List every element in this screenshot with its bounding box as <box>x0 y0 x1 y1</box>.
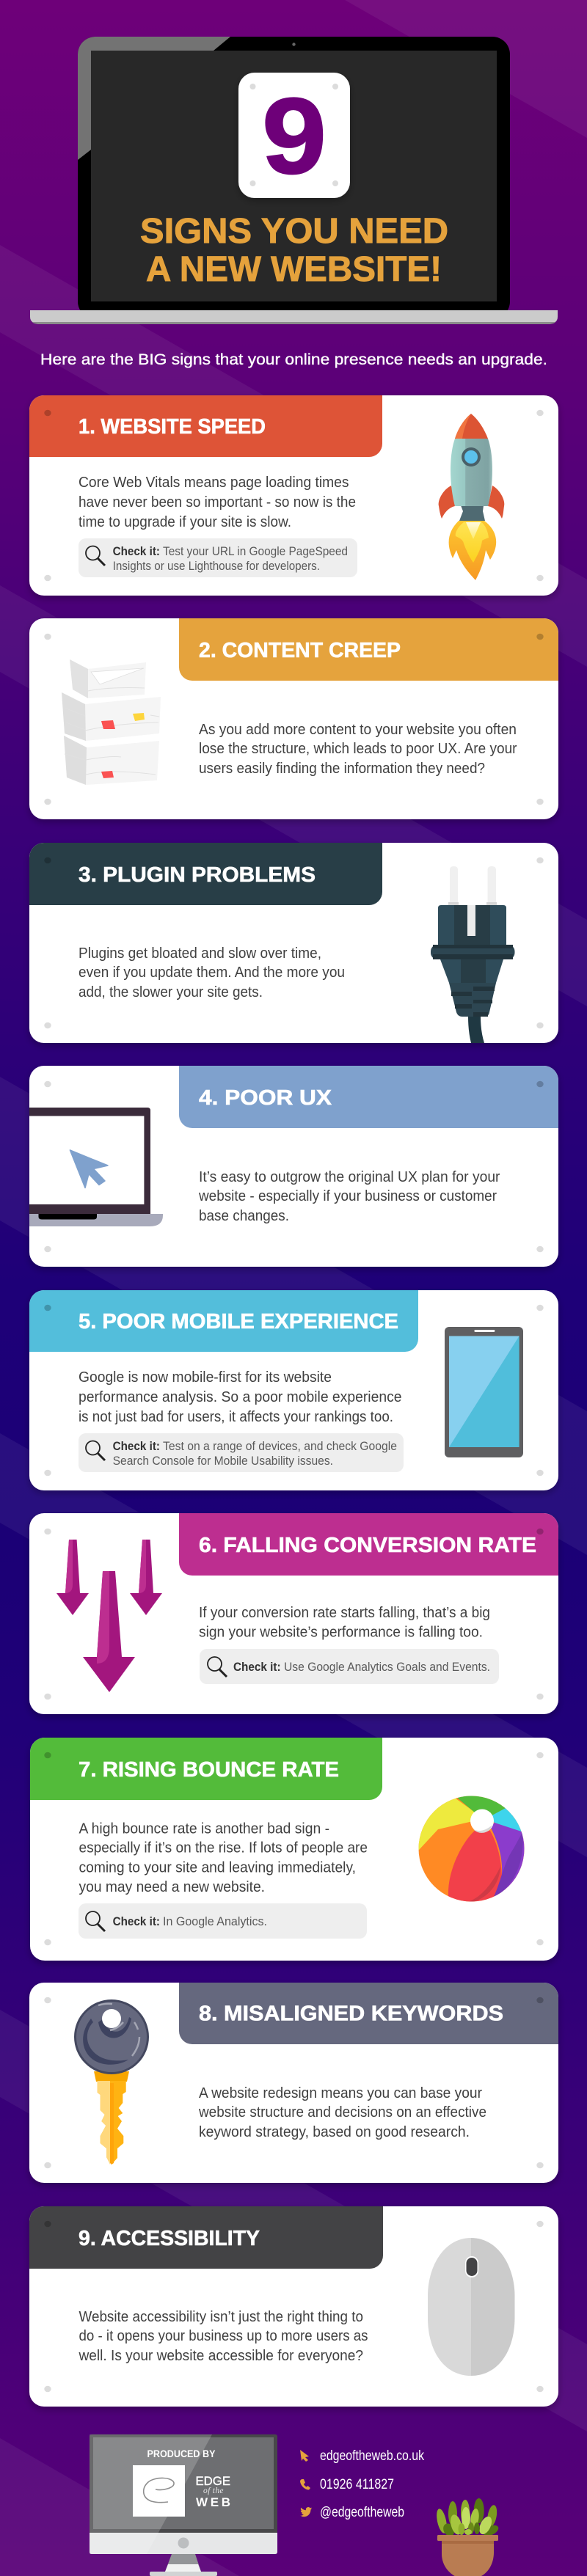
heading band <box>29 843 382 905</box>
arrow left <box>56 1540 89 1615</box>
heading band <box>179 1513 558 1576</box>
monitor stand <box>165 2554 201 2572</box>
monitor body <box>90 2434 277 2554</box>
heading band <box>29 395 382 457</box>
check it callout <box>79 1903 367 1939</box>
body text: If your conversion rate starts falling, that’s a big <box>199 1605 490 1621</box>
heading: 2. CONTENT CREEP <box>199 639 401 662</box>
arrow large <box>83 1571 135 1692</box>
heading band <box>29 2206 383 2269</box>
body text: website - especially if your business or customer <box>198 1188 497 1204</box>
check it callout: Insights or use Lighthouse for developers. <box>113 560 320 573</box>
check it callout <box>79 538 357 577</box>
body text: performance analysis. So a poor mobile experience <box>79 1389 402 1405</box>
logo: of the <box>203 2487 223 2495</box>
title <box>140 212 448 289</box>
hero: laptop with title <box>30 37 558 324</box>
icon: magnifier <box>208 1657 227 1677</box>
body text <box>199 1605 490 1640</box>
body text <box>198 2085 486 2140</box>
body text: sign your website’s performance is falling too. <box>199 1624 483 1640</box>
twitter: @edgeoftheweb <box>320 2505 404 2520</box>
footer: potted plant <box>435 2498 500 2576</box>
icon: falling arrows <box>56 1540 162 1692</box>
heading: 1. WEBSITE SPEED <box>79 415 266 439</box>
heading: 9. ACCESSIBILITY <box>79 2227 260 2250</box>
heading band <box>179 1066 558 1128</box>
body text: do - it opens your business up to more users as <box>79 2328 368 2344</box>
logo: EDGE <box>195 2474 230 2488</box>
body text <box>198 1169 500 1224</box>
icon: key <box>74 1999 149 2165</box>
panel: 7 rising bounce rate <box>30 1738 558 1961</box>
footer: contact details <box>300 2448 424 2520</box>
panel: 1 website speed <box>29 395 558 596</box>
icon: phone <box>300 2479 310 2489</box>
check it callout: Check it: <box>113 545 160 558</box>
body text: website structure and decisions on an effective <box>198 2104 486 2121</box>
title: SIGNS YOU NEED <box>140 212 448 251</box>
panel: 5 poor mobile experience <box>29 1290 558 1490</box>
panel: 4 poor UX <box>29 1066 558 1267</box>
laptop base <box>30 310 558 324</box>
body text: As you add more content to your website you often <box>199 722 517 738</box>
heading band <box>179 1983 558 2044</box>
phone: 01926 411827 <box>320 2477 394 2492</box>
check it callout: Check it: <box>113 1440 160 1453</box>
body text: you may need a new website. <box>79 1879 265 1895</box>
body text: lose the structure, which leads to poor UX. Are your <box>199 741 517 757</box>
icon: pointer <box>300 2450 309 2462</box>
body text: base changes. <box>199 1208 289 1224</box>
body text <box>79 2309 368 2364</box>
body text: Plugins get bloated and slow over time, <box>79 945 321 962</box>
icon: laptop with cursor <box>29 1108 163 1226</box>
body text: Core Web Vitals means page loading times <box>79 475 349 491</box>
body text: even if you update them. And the more you <box>79 965 345 981</box>
heading band <box>179 618 558 681</box>
intro text: Here are the BIG signs that your online presence needs an upgrade. <box>40 351 547 368</box>
body text: A high bounce rate is another bad sign - <box>79 1821 329 1837</box>
body text <box>79 1369 402 1425</box>
heading band <box>30 1738 382 1800</box>
body text <box>79 475 356 530</box>
body text: especially if it’s on the rise. If lots of people are <box>79 1840 368 1856</box>
check it callout: Use Google Analytics Goals and Events. <box>284 1661 490 1674</box>
body text: Website accessibility isn’t just the right thing to <box>79 2309 363 2325</box>
logo <box>133 2465 230 2517</box>
panel: 8 misaligned keywords <box>29 1983 558 2183</box>
footer: produced by monitor <box>90 2434 277 2576</box>
body text: well. Is your website accessible for everyone? <box>79 2348 363 2364</box>
body text: time to upgrade if your site is slow. <box>79 514 291 530</box>
body text <box>199 722 517 777</box>
body text: have never been so important - so now is the <box>79 494 356 511</box>
body text <box>79 945 345 1000</box>
icon: beach ball <box>418 1796 524 1901</box>
body text: A website redesign means you can base your <box>199 2085 482 2101</box>
body text: Google is now mobile-first for its website <box>79 1369 332 1386</box>
title: A NEW WEBSITE! <box>146 250 442 289</box>
check it callout: Check it: <box>113 1915 160 1928</box>
panel: 6 falling conversion rate <box>29 1513 558 1714</box>
laptop screen <box>91 51 497 301</box>
body text: is not just bad for users, it affects your rankings too. <box>79 1409 393 1425</box>
panel: 9 accessibility <box>29 2206 558 2407</box>
laptop bezel <box>78 37 510 319</box>
check it callout: Search Console for Mobile Usability issues. <box>113 1455 333 1468</box>
body text: It’s easy to outgrow the original UX plan for your <box>199 1169 500 1185</box>
check it callout: Test your URL in Google PageSpeed <box>163 545 348 558</box>
cursor <box>70 1150 108 1188</box>
panel: 2 content creep <box>29 618 558 819</box>
number card <box>238 73 350 198</box>
icon: magnifier <box>86 1441 105 1460</box>
body text: users easily finding the information they need? <box>199 761 485 777</box>
heading: 8. MISALIGNED KEYWORDS <box>199 2002 503 2026</box>
body text: keyword strategy, based on good research. <box>199 2124 470 2140</box>
icon: smartphone <box>445 1327 523 1457</box>
icon: mouse <box>428 2238 515 2376</box>
phone <box>300 2477 394 2492</box>
heading: 4. POOR UX <box>199 1086 332 1110</box>
logo: WEB <box>196 2495 230 2509</box>
produced by label: PRODUCED BY <box>147 2448 216 2459</box>
check it callout: Check it: <box>233 1661 281 1674</box>
arrow right <box>130 1540 162 1615</box>
big number nine: 9 <box>262 76 327 197</box>
twitter <box>300 2505 404 2520</box>
check it callout <box>79 1433 404 1472</box>
panel: 3 plugin problems <box>29 843 558 1043</box>
icon: plug <box>431 866 515 1043</box>
heading: 6. FALLING CONVERSION RATE <box>199 1534 536 1557</box>
body text <box>79 1821 368 1895</box>
icon: rocket <box>439 414 504 580</box>
check it callout: Test on a range of devices, and check Google <box>163 1440 397 1453</box>
heading: 5. POOR MOBILE EXPERIENCE <box>79 1310 398 1333</box>
icon: twitter bird <box>300 2507 312 2517</box>
heading: 7. RISING BOUNCE RATE <box>79 1758 339 1782</box>
icon: magnifier <box>86 546 105 566</box>
body text: add, the slower your site gets. <box>79 984 263 1000</box>
heading: 3. PLUGIN PROBLEMS <box>79 863 316 887</box>
icon: paper stack <box>62 659 161 785</box>
check it callout <box>200 1649 499 1684</box>
check it callout: In Google Analytics. <box>163 1915 267 1928</box>
icon: magnifier <box>86 1911 105 1931</box>
website: edgeoftheweb.co.uk <box>320 2448 424 2464</box>
body text: coming to your site and leaving immediately, <box>79 1860 356 1876</box>
heading band <box>29 1290 418 1352</box>
